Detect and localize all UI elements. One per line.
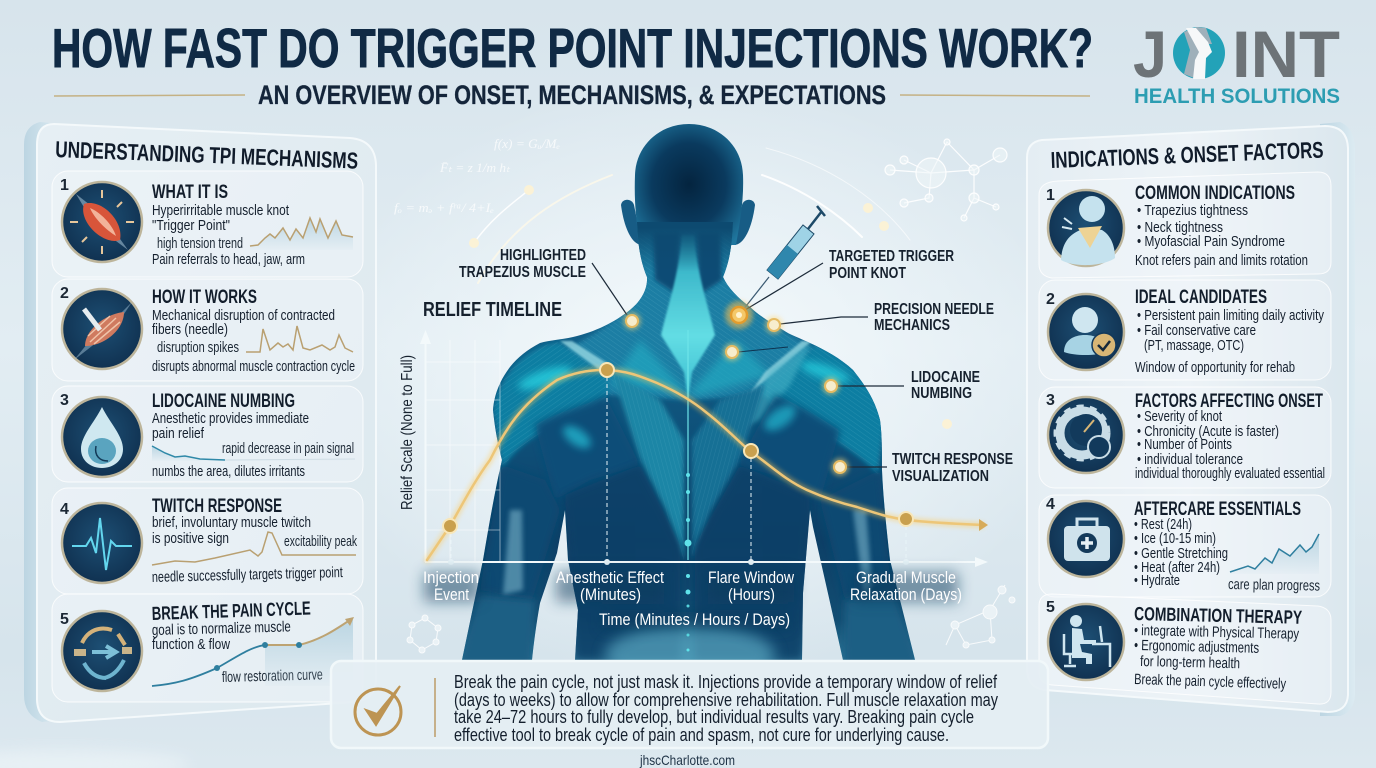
logo: Joint Health Solutions: J [1133, 17, 1167, 91]
tick dots [448, 559, 909, 565]
card 4: aftercare essentials [1039, 495, 1331, 597]
lower back glow [599, 619, 781, 660]
time axis labels: (Minutes) [580, 585, 641, 604]
text: brief, involuntary muscle twitch [152, 514, 311, 531]
text: high tension trend [157, 235, 243, 252]
icon: neck pain [1048, 190, 1124, 266]
icon: gear and gauges [1048, 397, 1124, 473]
panel: understanding TPI mechanisms [24, 122, 376, 722]
spine diamond [661, 235, 715, 400]
callout: twitch response visualization [831, 451, 1013, 485]
card 4: twitch response: 4 [60, 501, 69, 518]
teres muscles [535, 395, 640, 500]
card 2: ideal candidates: 2 [1046, 291, 1055, 308]
latissimus [565, 465, 680, 660]
card 4: aftercare essentials: 4 [1046, 496, 1055, 513]
time axis labels: Time (Minutes / Hours / Days) [599, 610, 790, 629]
text: WHAT IT IS [152, 182, 228, 203]
time axis labels: Gradual Muscle [856, 568, 956, 587]
text: disruption spikes [157, 339, 239, 356]
time axis labels: Injection [423, 568, 479, 587]
forearms [458, 595, 535, 665]
text: • Heat (after 24h) [1134, 559, 1220, 576]
pale clavicle bands [560, 341, 615, 372]
icon: water drop [62, 397, 142, 477]
text [1135, 287, 1324, 376]
text: Break the pain cycle effectively [1134, 671, 1287, 693]
icon: pulse [62, 503, 142, 583]
callout: targeted trigger point knot [725, 248, 954, 329]
text: • Persistent pain limiting daily activity [1137, 307, 1324, 324]
figure: back and shoulders [462, 124, 915, 660]
takeaway text: Break the pain cycle, not just mask it. Injections provide a temporary window of relief [454, 672, 998, 692]
text: HOW IT WORKS [152, 287, 257, 308]
text: TWITCH RESPONSE [152, 496, 282, 517]
icon: person at desk [1048, 604, 1124, 680]
callout: twitch response visualization: TWITCH RESPONSE [892, 451, 1013, 468]
text: • Neck tightness [1137, 219, 1223, 236]
callout: targeted trigger point knot: POINT KNOT [829, 265, 906, 282]
icon: muscle knot [62, 182, 142, 262]
sparkline [152, 532, 356, 565]
text: • Severity of knot [1137, 408, 1223, 425]
text: • Ergonomic adjustments [1134, 637, 1259, 657]
text: • integrate with Physical Therapy [1134, 622, 1300, 643]
icon: first aid kit [1048, 501, 1124, 577]
text [151, 598, 323, 686]
text: Anesthetic provides immediate [152, 410, 309, 427]
text: Hyperirritable muscle knot [152, 202, 290, 219]
card 5: break the pain cycle: 5 [60, 611, 69, 628]
callout: targeted trigger point knot: TARGETED TRIGGER [829, 248, 954, 265]
card 1: what it is [52, 171, 363, 277]
chart grid [425, 340, 500, 562]
card 5: break the pain cycle [52, 594, 363, 702]
text: • individual tolerance [1137, 451, 1243, 468]
molecule decoration bottom right [946, 585, 1015, 648]
callout: lidocaine numbing: NUMBING [911, 385, 972, 402]
time axis labels: (Hours) [728, 585, 775, 604]
time axis labels: Event [434, 585, 469, 604]
time axis labels: Relaxation (Days) [850, 585, 962, 604]
molecule decoration [885, 139, 1007, 221]
card 3: lidocaine numbing: 3 [60, 392, 69, 409]
time axis labels [423, 568, 962, 629]
text [1134, 499, 1320, 595]
text: (PT, massage, OTC) [1144, 337, 1244, 354]
text: rapid decrease in pain signal [222, 440, 354, 457]
text: • Trapezius tightness [1137, 202, 1248, 219]
upper arms [478, 464, 552, 583]
text: • Rest (24h) [1134, 516, 1192, 533]
text [152, 287, 355, 375]
card 3: factors affecting onset: 3 [1046, 392, 1055, 409]
y axis label: Relief Scale (None to Full) [399, 355, 416, 510]
takeaway text [454, 672, 998, 745]
text: • Hydrate [1134, 572, 1180, 589]
sparkline [250, 218, 353, 250]
callout: highlighted trapezius muscle: HIGHLIGHTED [500, 247, 586, 264]
time axis labels: Anesthetic Effect [556, 568, 664, 587]
sparkline [1230, 534, 1319, 574]
text: BREAK THE PAIN CYCLE [151, 598, 311, 625]
text [152, 391, 354, 480]
takeaway text: take 24–72 hours to fully develop, but individual results vary. Breaking pain cycle [454, 707, 974, 727]
background formulas: f(x) = Gᵤ/Mₑ [494, 136, 560, 151]
takeaway text: effective tool to break cycle of pain and spasm, not cure for underlying cause. [454, 725, 949, 745]
text: COMBINATION THERAPY [1134, 604, 1303, 629]
card 2: how it works [52, 279, 363, 381]
text: disrupts abnormal muscle contraction cycle [152, 358, 355, 375]
card 3: factors affecting onset [1039, 387, 1331, 488]
background formulas [394, 136, 560, 215]
syringe [739, 206, 825, 315]
text: Window of opportunity for rehab [1135, 359, 1295, 376]
subtitle: AN OVERVIEW OF ONSET, MECHANISMS, & EXPECTATIONS [258, 80, 886, 110]
text: • Fail conservative care [1137, 322, 1256, 339]
sparkline [152, 446, 355, 461]
callout: precision needle mechanics [765, 301, 994, 334]
flow curve [152, 617, 354, 686]
head [621, 124, 755, 245]
text: "Trigger Point" [152, 217, 230, 234]
neck blend into head [637, 222, 733, 268]
spine dots [684, 330, 692, 652]
card 2: ideal candidates [1039, 280, 1331, 380]
text: excitability peak [284, 533, 357, 550]
callout: highlighted trapezius muscle [459, 247, 641, 330]
card 5: combination therapy [1039, 594, 1331, 704]
callout: lidocaine numbing [822, 369, 980, 402]
axes [420, 330, 988, 567]
icon: cycle arrows [62, 611, 142, 691]
drop lines [451, 370, 906, 562]
text: for long-term health [1140, 653, 1240, 672]
time axis labels: Flare Window [708, 568, 795, 587]
card 1: what it is: 1 [60, 177, 69, 194]
background formulas: F̄ₜ = z 1/m hₜ [439, 160, 511, 175]
molecule decoration bottom left [407, 615, 441, 653]
text [152, 496, 357, 586]
text: goal is to normalize muscle [152, 618, 291, 639]
background formulas: fₒ = mₔ + fʳᵃ/ 4+Iₑ [394, 200, 494, 215]
card 1: common indications [1039, 172, 1331, 278]
text: Knot refers pain and limits rotation [1135, 252, 1308, 269]
logo: Joint Health Solutions [1133, 17, 1340, 108]
neck and trapezius [568, 239, 812, 402]
relief curve [427, 370, 988, 560]
text: • Number of Points [1137, 436, 1232, 453]
torso and arms [462, 222, 915, 660]
callout: precision needle mechanics: MECHANICS [874, 317, 950, 334]
text: pain relief [152, 425, 205, 442]
relief timeline chart [399, 299, 988, 629]
text [1135, 183, 1308, 269]
callout: twitch response visualization: VISUALIZATION [892, 468, 989, 485]
text: • Gentle Stretching [1134, 545, 1228, 562]
card 2: how it works: 2 [60, 285, 69, 302]
text: LIDOCAINE NUMBING [152, 391, 295, 412]
callout: lidocaine numbing: LIDOCAINE [911, 369, 980, 386]
panel: indications and onset factors [1027, 122, 1355, 716]
left deltoid [493, 342, 608, 470]
card 3: lidocaine numbing [52, 386, 363, 482]
text [1135, 391, 1325, 482]
logo: Joint Health Solutions: INT [1232, 17, 1340, 91]
icon: person with check [1048, 294, 1124, 370]
icon: check mark [355, 686, 401, 735]
text [152, 182, 305, 268]
card 4: twitch response [52, 488, 363, 594]
text: AFTERCARE ESSENTIALS [1134, 499, 1301, 520]
lower trapezius wedge [612, 372, 684, 560]
text: • Ice (10-15 min) [1134, 530, 1216, 547]
takeaway text: (days to weeks) to allow for comprehensive rehabilitation. Full muscle relaxation may [454, 690, 998, 710]
text: numbs the area, dilutes irritants [152, 463, 305, 480]
text: IDEAL CANDIDATES [1135, 287, 1267, 308]
text: fibers (needle) [152, 321, 228, 338]
curve points [443, 363, 913, 533]
text: care plan progress [1228, 576, 1320, 595]
card 1: common indications: 1 [1046, 187, 1055, 204]
card 5: combination therapy: 5 [1046, 599, 1055, 616]
text [1134, 604, 1303, 693]
marker: shoulder point [723, 343, 788, 361]
text: • Chronicity (Acute is faster) [1137, 423, 1279, 440]
callout: highlighted trapezius muscle: TRAPEZIUS MUSCLE [459, 264, 586, 281]
text: flow restoration curve [222, 666, 323, 686]
text: • Myofascial Pain Syndrome [1137, 233, 1285, 250]
icon: needle in muscle [62, 289, 142, 369]
text: Pain referrals to head, jaw, arm [152, 251, 305, 268]
sparkline [246, 326, 353, 352]
text: Mechanical disruption of contracted [152, 307, 335, 324]
text: function & flow [152, 636, 230, 653]
website footer: jhscCharlotte.com [639, 752, 735, 768]
right deltoid [766, 345, 885, 475]
logo: Joint Health Solutions: HEALTH SOLUTIONS [1134, 85, 1340, 108]
label halos [424, 572, 958, 628]
text: is positive sign [152, 530, 229, 547]
panel heading: UNDERSTANDING TPI MECHANISMS [55, 136, 359, 174]
text: COMMON INDICATIONS [1135, 183, 1295, 204]
chart heading: RELIEF TIMELINE [423, 299, 562, 321]
callout: precision needle mechanics: PRECISION NEEDLE [874, 301, 994, 318]
text: needle successfully targets trigger point [152, 564, 344, 586]
decorative arcs and glow dots [469, 148, 952, 429]
callout: key takeaway [331, 661, 1048, 748]
